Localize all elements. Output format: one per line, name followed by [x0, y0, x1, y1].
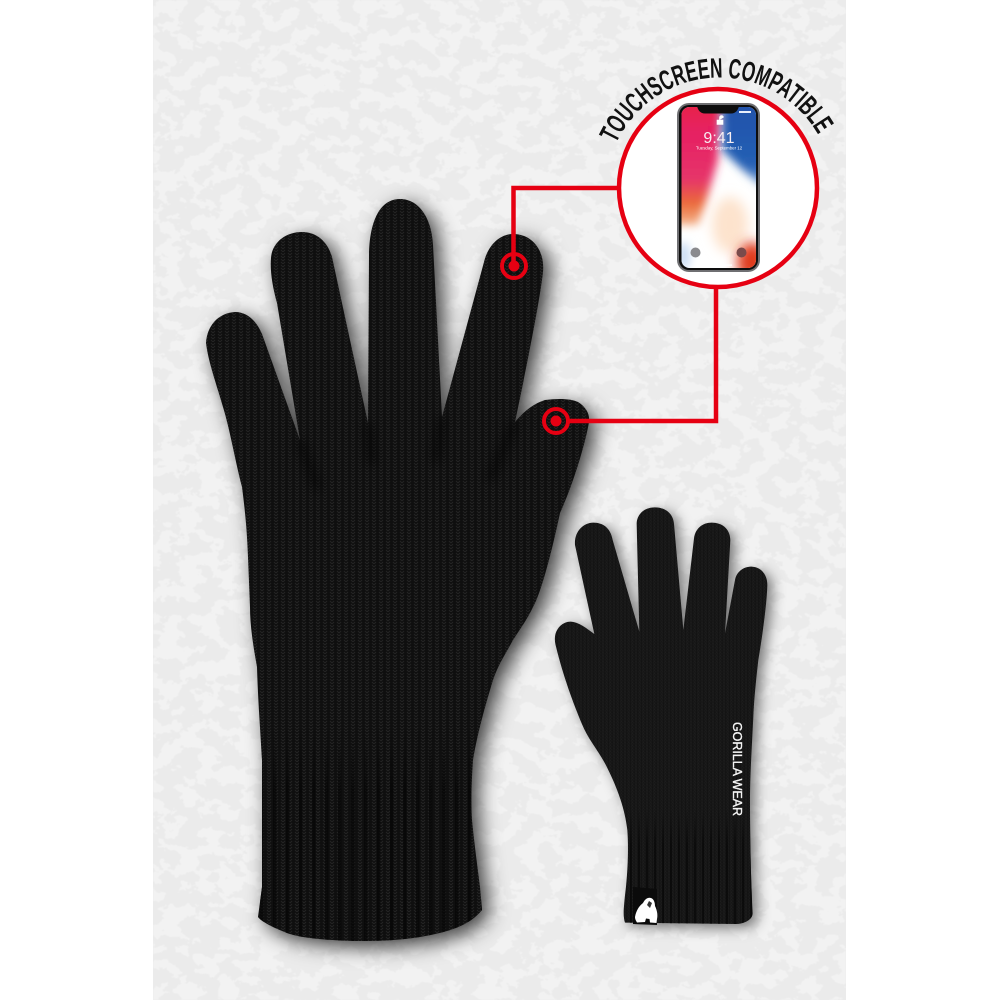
connector lines	[514, 188, 716, 421]
lock icon	[717, 116, 724, 124]
phone date: Tuesday, September 12	[696, 146, 743, 150]
small glove shadow	[560, 511, 772, 928]
phone body	[677, 103, 760, 272]
small glove cuff ribbing	[624, 825, 752, 924]
large glove shadow	[213, 205, 596, 947]
home bar	[707, 264, 732, 266]
small glove	[555, 507, 767, 927]
gorilla logo	[635, 898, 657, 923]
large glove	[206, 199, 589, 950]
flashlight button	[690, 248, 700, 258]
phone illustration	[677, 103, 760, 272]
brand tag with gorilla logo	[633, 887, 657, 925]
phone time: 9:41	[703, 130, 735, 147]
infographic canvas	[153, 0, 846, 1000]
background panel	[153, 0, 846, 1000]
status icons	[739, 111, 751, 113]
lower connector	[566, 286, 716, 421]
curved heading: TOUCHSCREEN COMPATIBLE	[598, 58, 834, 140]
phone notch	[697, 106, 739, 114]
touch point: index fingertip	[502, 254, 526, 278]
large glove finger creases and cuff ribbing	[240, 417, 515, 950]
upper connector	[514, 188, 620, 262]
brand text: Gorilla Wear: GORILLA WEAR	[730, 722, 744, 816]
touch point: thumb tip	[544, 409, 568, 433]
camera button	[736, 248, 746, 258]
callout circle	[619, 89, 817, 287]
phone wallpaper	[682, 107, 756, 268]
